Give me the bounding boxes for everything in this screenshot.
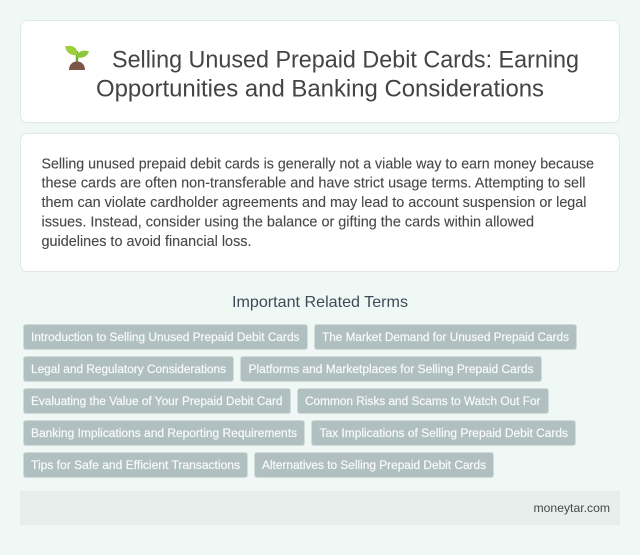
tag: Introduction to Selling Unused Prepaid Debit Cards [31, 330, 300, 344]
tag: Evaluating the Value of Your Prepaid Debit Card [31, 394, 282, 408]
tag [298, 388, 548, 414]
tag [314, 324, 576, 350]
title [96, 46, 579, 102]
panel: header [20, 20, 620, 122]
tag [24, 388, 290, 414]
tag [24, 452, 248, 478]
tag: The Market Demand for Unused Prepaid Cards [322, 330, 569, 344]
summary text: them can violate cardholder agreements and may lead to account suspension or legal [42, 195, 586, 211]
summary text: Selling unused prepaid debit cards is generally not a viable way to earn money because [42, 156, 594, 172]
title: Opportunities and Banking Considerations [96, 76, 544, 102]
footer [20, 491, 620, 525]
tag [254, 452, 494, 478]
panel: summary [20, 134, 620, 272]
tag [24, 324, 308, 350]
tag: Common Risks and Scams to Watch Out For [305, 394, 540, 408]
tag: Tips for Safe and Efficient Transactions [31, 458, 240, 472]
title: Selling Unused Prepaid Debit Cards: Earning [112, 46, 579, 74]
heading: related terms: Important Related Terms [232, 294, 408, 311]
footer source: moneytar.com [534, 501, 610, 515]
tag: Alternatives to Selling Prepaid Debit Cards [262, 458, 486, 472]
tag: Legal and Regulatory Considerations [31, 362, 226, 376]
tag: Banking Implications and Reporting Requirements [31, 426, 297, 440]
icon: seedling [65, 46, 89, 70]
tag [24, 420, 304, 446]
summary text: issues. Instead, consider using the balance or gifting the cards within allowed [42, 214, 534, 230]
summary text [42, 156, 594, 250]
tag: Tax Implications of Selling Prepaid Debit Cards [320, 426, 568, 440]
tag [24, 356, 234, 382]
summary text: these cards are often non-transferable and have strict usage terms. Attempting to sell [42, 176, 586, 192]
tag [240, 356, 542, 382]
tag [312, 420, 576, 446]
tag: Platforms and Marketplaces for Selling Prepaid Cards [248, 362, 534, 376]
summary text: guidelines to avoid financial loss. [42, 234, 252, 250]
tags: related terms [24, 324, 576, 478]
